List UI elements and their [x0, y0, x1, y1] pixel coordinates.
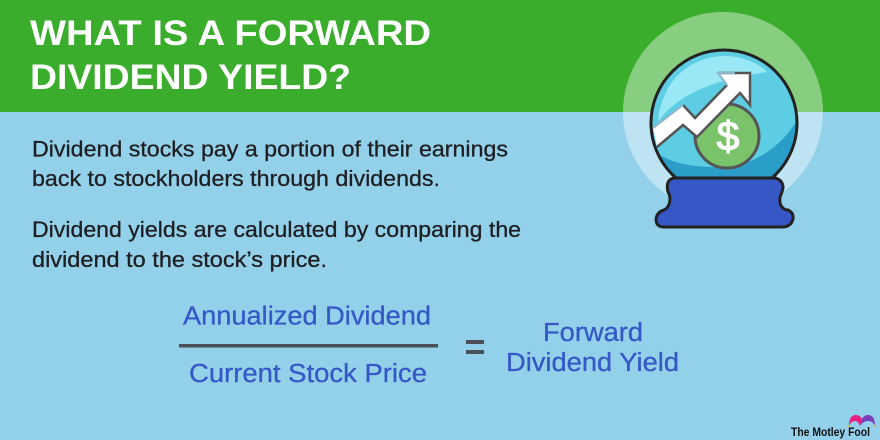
header band [0, 0, 880, 112]
paragraph 2: Dividend yields are calculated by comparing the [32, 217, 521, 242]
fraction bar [179, 344, 438, 348]
paragraph 2 [32, 217, 521, 272]
arrow [653, 73, 750, 147]
title: DIVIDEND YIELD? [30, 58, 351, 97]
paragraph 1 [32, 136, 508, 191]
paragraph 2: dividend to the stock’s price. [32, 247, 327, 272]
formula [179, 302, 679, 388]
equals sign [466, 340, 484, 354]
title [30, 14, 431, 97]
logo: The Motley Fool [791, 415, 876, 439]
globe base [656, 178, 793, 227]
paragraph 1: back to stockholders through dividends. [32, 166, 440, 191]
result: Dividend Yield [506, 349, 679, 377]
result [506, 319, 679, 377]
title: WHAT IS A FORWARD [30, 14, 431, 53]
denominator: Current Stock Price [189, 360, 427, 388]
numerator: Annualized Dividend [183, 302, 431, 330]
result: Forward [543, 319, 643, 347]
paragraph 1: Dividend stocks pay a portion of their earnings [32, 136, 508, 162]
icon: crystal ball with rising arrow and dollar coin [623, 12, 823, 227]
dollar sign: $ [717, 113, 740, 159]
logo: The Motley Fool: The Motley Fool [791, 427, 870, 439]
